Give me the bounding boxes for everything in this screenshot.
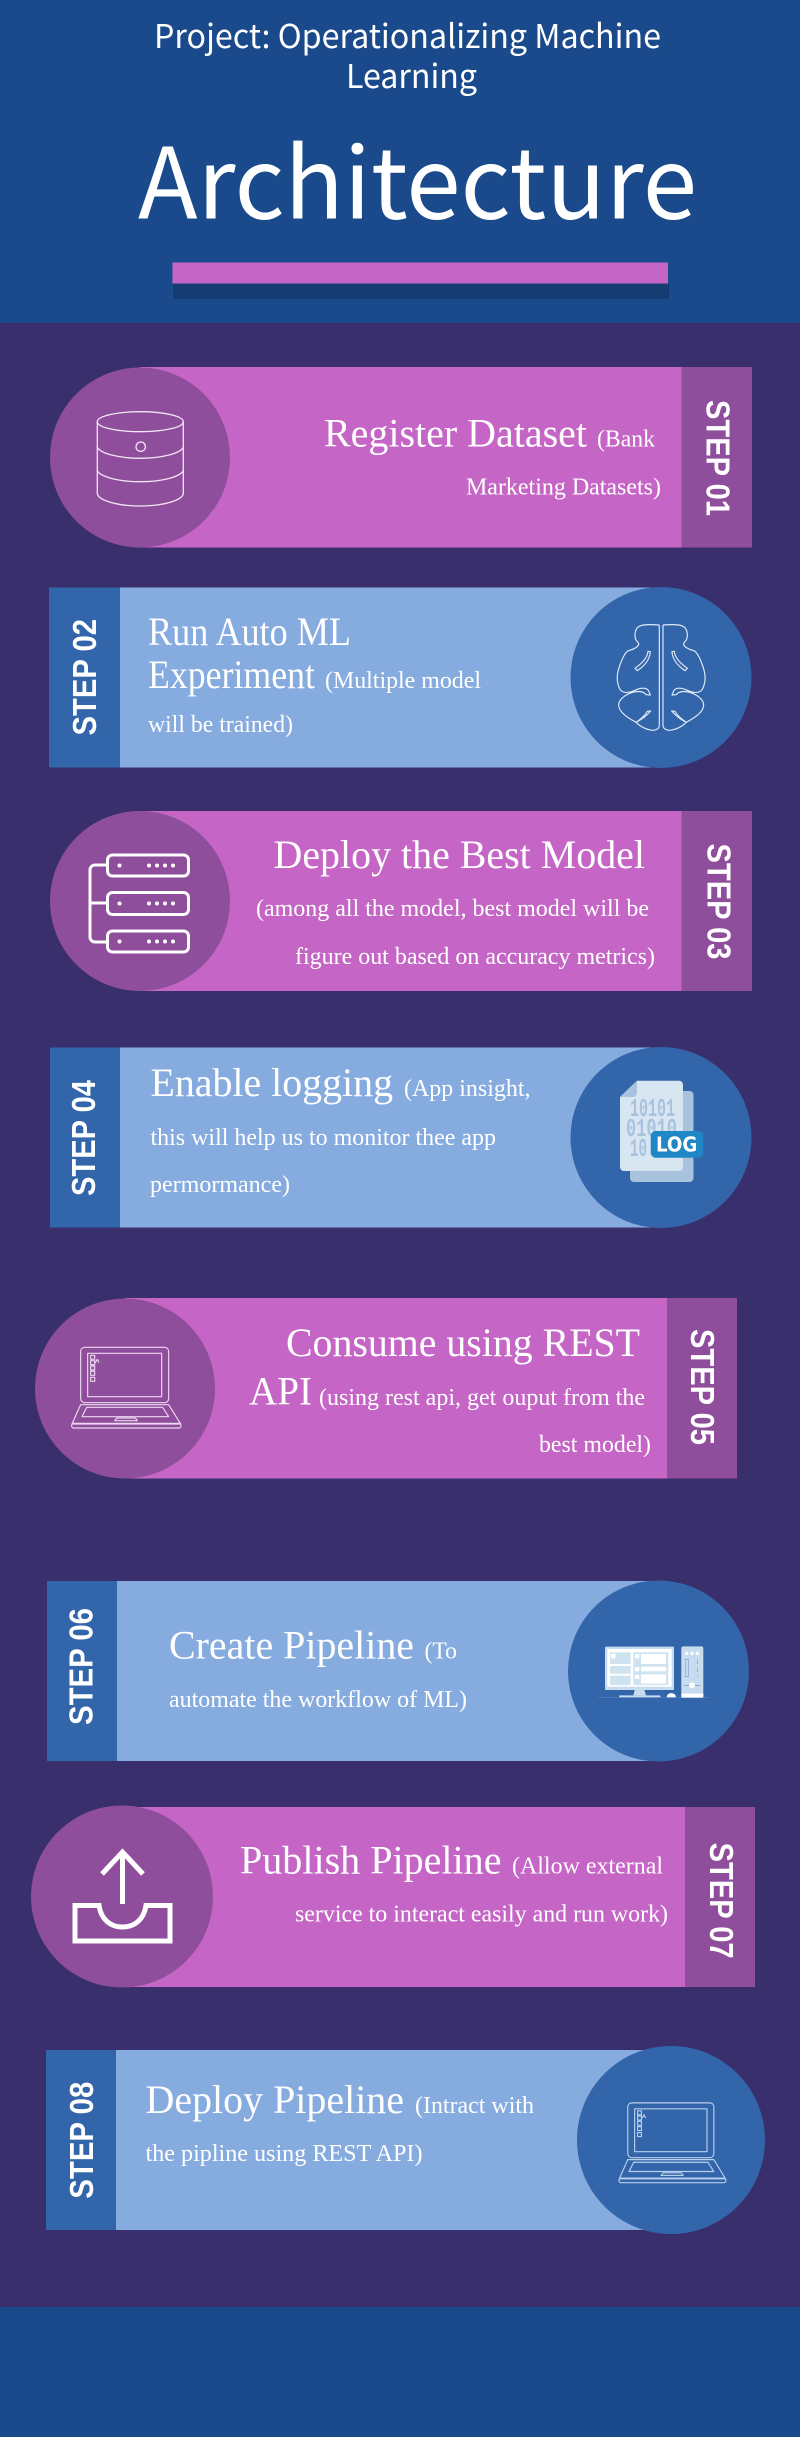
icon: brain (617, 625, 705, 730)
step 02 heading: Experiment (148, 652, 315, 697)
step 07 description (295, 1854, 668, 1928)
icon: log file: 01010 (626, 1114, 677, 1144)
step 02 description (148, 668, 481, 738)
step 02 label: STEP 02 (66, 619, 103, 736)
icon: laptop (72, 1347, 181, 1428)
icon: log file: 10101 (630, 1094, 675, 1124)
step 04 description: (App insight, (404, 1076, 530, 1102)
step 08 description: (Intract with (415, 2093, 534, 2119)
step 05 label: STEP 05 (684, 1329, 721, 1445)
icon: log file: LOG (656, 1133, 697, 1157)
step 03 icon circle (50, 811, 230, 991)
step 07 heading: Publish Pipeline (240, 1838, 502, 1882)
step 04 description (150, 1076, 530, 1198)
icon: log file (620, 1081, 703, 1182)
subtitle: Project: Operationalizing Machine (154, 10, 661, 58)
panel: step 08 (46, 2046, 765, 2234)
step 04 icon circle (570, 1047, 752, 1228)
step 06 tab (47, 1581, 117, 1761)
step 06 description: (To (424, 1638, 457, 1664)
step 01 tab (682, 367, 752, 548)
step 05 icon circle (35, 1298, 215, 1478)
step 03 description (256, 896, 655, 970)
icon: server hierarchy (90, 855, 188, 952)
step 05 description: best model) (539, 1432, 651, 1458)
header band (0, 0, 800, 323)
step 01 label: STEP 01 (700, 400, 737, 516)
step 08 tab (46, 2050, 116, 2230)
step 03 description: (among all the model, best model will be (256, 896, 649, 922)
step 08 description: the pipline using REST API) (146, 2141, 422, 2167)
step 03 tab (682, 811, 752, 991)
step 04 heading: Enable logging (150, 1060, 393, 1105)
subtitle: Learning (346, 50, 477, 98)
step 02 heading: Run Auto ML (148, 609, 351, 654)
panel: step 04 (50, 1047, 752, 1228)
step 02 tab (49, 588, 120, 768)
step 04 tab (50, 1048, 120, 1228)
panel: step 07 (31, 1806, 755, 1988)
panel: step 01 (50, 367, 752, 548)
step 02 icon circle (570, 587, 752, 768)
step 03 label: STEP 03 (701, 844, 738, 960)
icon: upload tray (75, 1852, 170, 1941)
step 08 heading: Deploy Pipeline (146, 2077, 404, 2122)
step 05 tab (667, 1298, 737, 1478)
step 07 description: service to interact easily and run work) (295, 1902, 668, 1928)
step 08 label: STEP 08 (63, 2082, 100, 2199)
step 07 tab (685, 1807, 755, 1987)
step 03 description: figure out based on accuracy metrics) (295, 944, 655, 970)
step 08 description (146, 2093, 534, 2167)
step 05 heading: API (249, 1368, 312, 1414)
step 04 description: permormance) (150, 1172, 290, 1198)
step 05 description (319, 1385, 651, 1458)
step 06 description: automate the workflow of ML) (169, 1687, 467, 1713)
icon: laptop (619, 2103, 726, 2183)
step 07 label: STEP 07 (703, 1843, 740, 1959)
panel: step 05 (35, 1298, 737, 1478)
icon: log file: 10 (630, 1134, 647, 1164)
title underline bar (172, 262, 669, 299)
step 01 description: (Bank (597, 426, 655, 452)
step 05 heading (249, 1320, 640, 1414)
footer band (0, 2307, 800, 2437)
step 03 heading: Deploy the Best Model (274, 832, 645, 877)
panel: step 06 (47, 1580, 749, 1762)
step 06 description (169, 1638, 467, 1713)
step 01 description (466, 426, 661, 501)
step 04 label: STEP 04 (65, 1079, 102, 1196)
icon: desktop computer (598, 1646, 710, 1698)
step 06 heading: Create Pipeline (169, 1622, 414, 1668)
step 06 icon circle (568, 1580, 749, 1762)
step 02 description: will be trained) (148, 712, 293, 738)
step 02 description: (Multiple model (325, 668, 481, 694)
step 07 icon circle (31, 1806, 213, 1988)
icon: database (97, 412, 183, 506)
step 06 label: STEP 06 (62, 1608, 100, 1725)
step 02 heading (148, 609, 351, 697)
panel: step 02 (49, 587, 752, 768)
step 05 heading: Consume using REST (286, 1320, 640, 1365)
step 08 icon circle (577, 2046, 765, 2234)
step 04 description: this will help us to monitor thee app (150, 1125, 496, 1151)
step 01 description: Marketing Datasets) (466, 475, 661, 501)
step 01 heading: Register Dataset (324, 410, 587, 456)
panel: step 03 (50, 811, 752, 991)
step 01 icon circle (50, 368, 230, 548)
subtitle (154, 10, 661, 98)
step 07 description: (Allow external (512, 1854, 663, 1880)
title: Architecture (138, 106, 697, 248)
step 05 description: (using rest api, get ouput from the (319, 1385, 645, 1411)
